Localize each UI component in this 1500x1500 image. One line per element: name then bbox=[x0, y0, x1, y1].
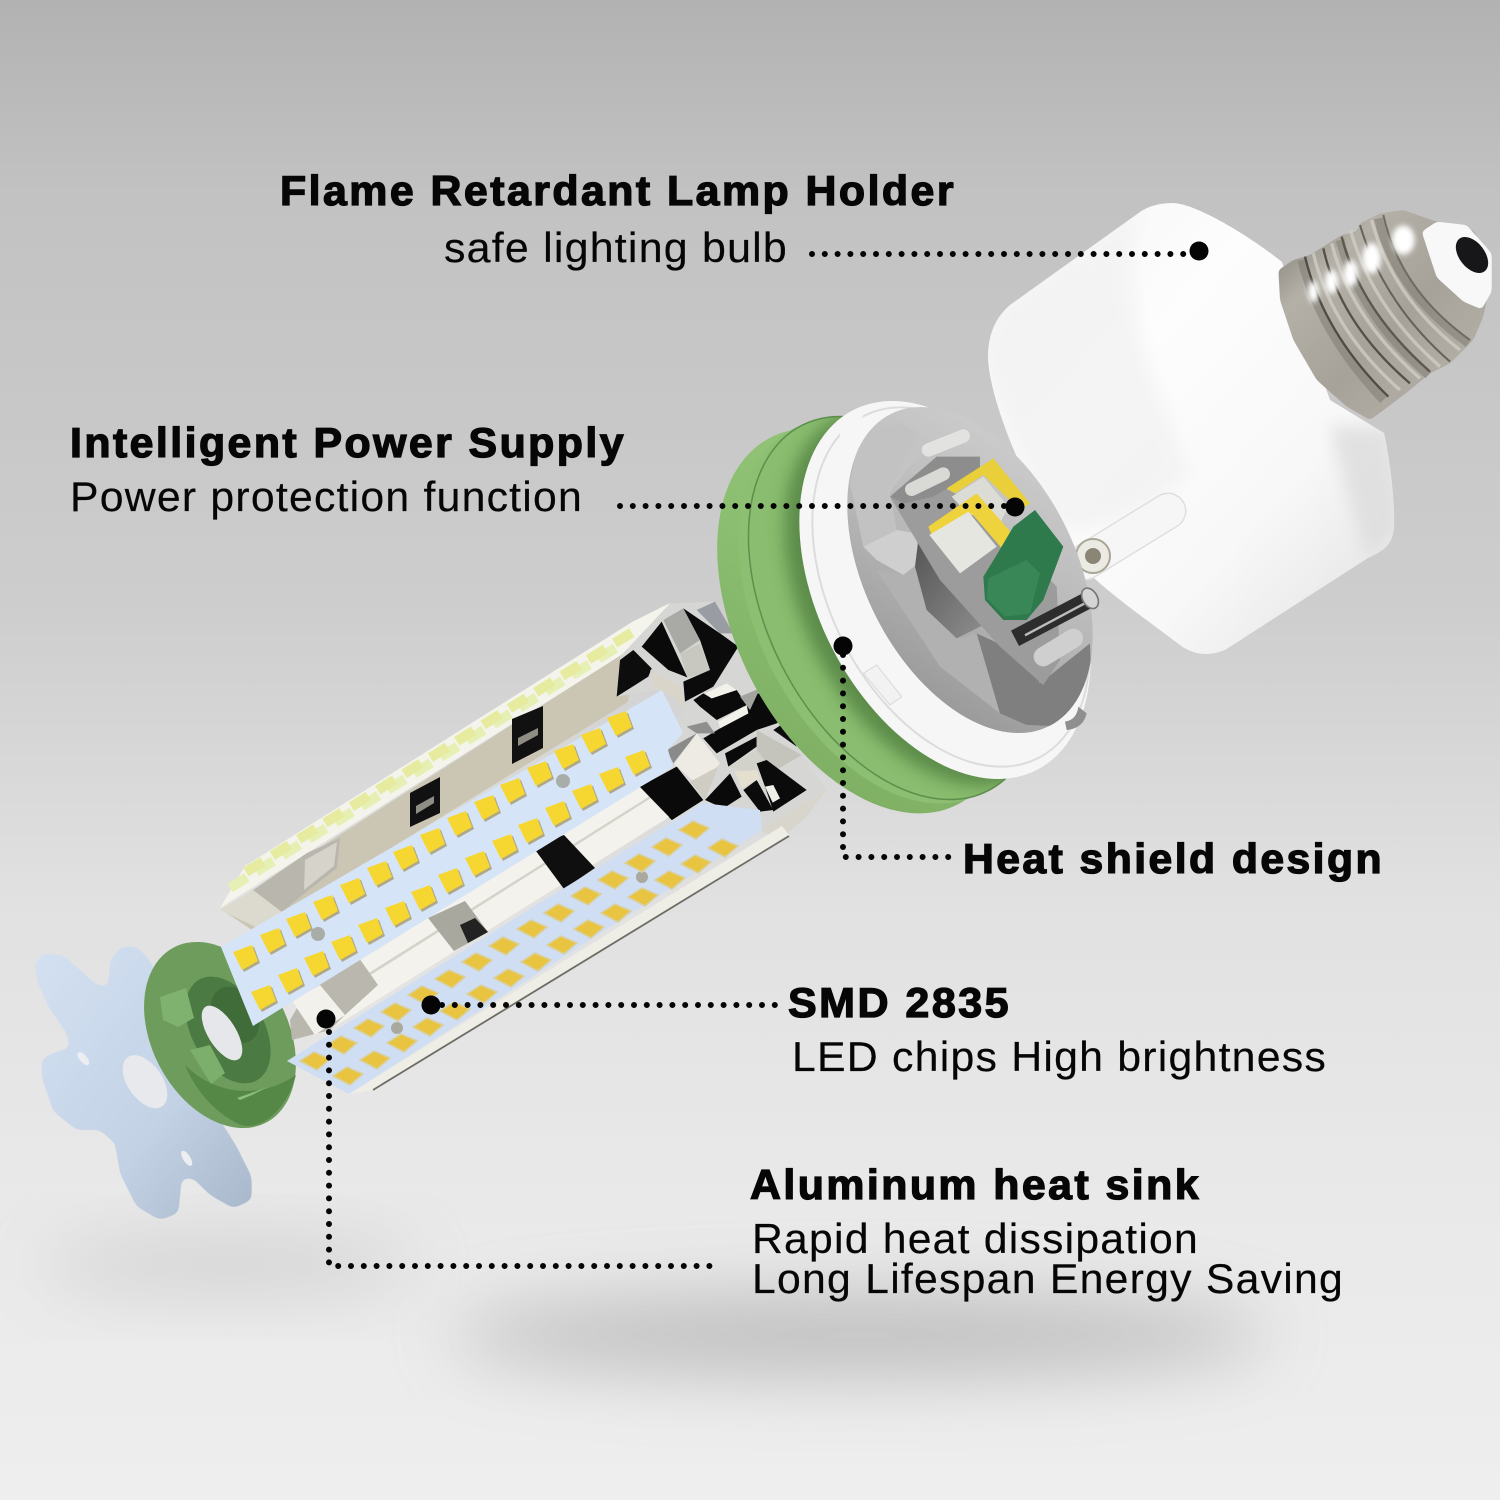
black facet bbox=[743, 780, 773, 812]
end cap clip upper bbox=[160, 988, 194, 1027]
black facet bbox=[705, 773, 742, 808]
plate screw hole right bbox=[179, 1149, 194, 1168]
leader dot bbox=[1006, 498, 1024, 516]
block stripe bbox=[655, 783, 691, 804]
panel screw one bbox=[311, 927, 325, 941]
black facet bbox=[617, 650, 652, 697]
heat sink mirrored end bbox=[617, 602, 827, 840]
back LED panel bbox=[220, 603, 670, 932]
thread groove bbox=[1342, 237, 1430, 372]
white lamp holder body bbox=[988, 203, 1400, 654]
beige facet bbox=[650, 670, 687, 712]
cavity light wall bbox=[850, 432, 896, 546]
yellow bracket back bbox=[947, 458, 1030, 510]
capacitor highlight bbox=[987, 560, 1040, 617]
ring tab bbox=[863, 665, 902, 705]
power supply cavity bbox=[840, 406, 1100, 733]
white ring bbox=[740, 352, 1150, 828]
description: LED chips High brightness bbox=[792, 1033, 1327, 1080]
black band bbox=[703, 692, 782, 753]
callout: SMD 2835 bbox=[422, 979, 1327, 1080]
cavity dark well bbox=[915, 540, 987, 638]
silver terminal one bbox=[928, 436, 963, 450]
white block back bbox=[952, 477, 1008, 523]
thread highlights bbox=[1308, 225, 1415, 302]
leader dot bbox=[1190, 242, 1208, 260]
icon: green end cap bbox=[113, 916, 327, 1154]
thread groove bbox=[1360, 225, 1450, 362]
thread groove bbox=[1323, 248, 1410, 383]
grey facet bbox=[740, 688, 760, 710]
leader dot bbox=[834, 636, 852, 656]
lower panel screw two bbox=[636, 871, 648, 883]
base contact hole bbox=[1449, 231, 1495, 279]
strip black block bbox=[533, 835, 595, 889]
lower LED panel bbox=[287, 767, 789, 1094]
callout: flame retardant lamp holder bbox=[280, 167, 1208, 271]
lower LED row two bbox=[333, 839, 738, 1085]
lower LED row one bbox=[300, 821, 709, 1070]
grey panel bbox=[728, 750, 773, 772]
disc side body bbox=[679, 372, 1091, 852]
silver terminal two bbox=[912, 474, 943, 489]
description: safe lighting bulb bbox=[444, 224, 788, 271]
callout: aluminum heat sink bbox=[316, 1010, 1344, 1302]
holder shading bbox=[988, 212, 1400, 560]
panel screw two bbox=[556, 774, 570, 788]
ground shadow bbox=[40, 1241, 1270, 1377]
back panel black reflection two bbox=[410, 777, 440, 827]
grey facet bbox=[697, 602, 733, 633]
callout: heat shield design bbox=[834, 636, 1384, 882]
end cap collar top bbox=[201, 978, 269, 1052]
grey facet bbox=[667, 733, 697, 763]
heading: Intelligent Power Supply bbox=[70, 419, 626, 466]
leader dot bbox=[422, 996, 440, 1014]
front LED panel bbox=[221, 690, 683, 1026]
base insulator tip bbox=[1422, 222, 1492, 309]
black block bbox=[640, 767, 703, 820]
back panel LED row front bbox=[230, 644, 622, 888]
pin two bbox=[1043, 638, 1073, 657]
green heat shield disc bbox=[717, 416, 1007, 814]
end tail bbox=[760, 790, 827, 840]
back panel front lip bbox=[220, 890, 282, 930]
pin one tip bbox=[1078, 585, 1102, 612]
strip white patch bbox=[292, 985, 345, 1035]
ring clip bottom bbox=[1065, 707, 1087, 730]
holder mounting slot bbox=[1085, 511, 1168, 562]
back panel mirror grey bbox=[253, 838, 340, 912]
lower panel board bbox=[287, 803, 762, 1094]
prism side bbox=[690, 767, 718, 800]
heading: SMD 2835 bbox=[788, 979, 1011, 1026]
end cap centre hole bbox=[194, 999, 250, 1067]
cavity interior shapes bbox=[850, 423, 1092, 727]
heading: Flame Retardant Lamp Holder bbox=[280, 167, 956, 214]
leader line bbox=[843, 655, 950, 857]
light facet bbox=[735, 770, 760, 788]
lower panel edge line bbox=[373, 836, 789, 1090]
back panel black reflection one bbox=[512, 706, 543, 764]
white facet bbox=[765, 785, 780, 803]
cavity light boss bbox=[863, 530, 918, 575]
cavity crescent bbox=[900, 605, 1000, 713]
front LED row one bbox=[233, 711, 634, 972]
black facet bbox=[642, 622, 687, 677]
thread groove bbox=[1383, 215, 1470, 340]
description line one: Rapid heat dissipation bbox=[752, 1215, 1199, 1262]
screw base bbox=[1278, 210, 1495, 420]
description line two: Long Lifespan Energy Saving bbox=[752, 1255, 1344, 1302]
grey panel bbox=[757, 730, 802, 772]
strip mirror detail bbox=[460, 918, 488, 943]
heading: Aluminum heat sink bbox=[750, 1161, 1201, 1208]
back panel mirror light bbox=[304, 842, 337, 890]
lower panel black block bbox=[640, 767, 703, 820]
white prism bbox=[674, 733, 720, 787]
white block front bbox=[929, 512, 997, 573]
end cap collar bbox=[168, 962, 288, 1098]
plate screw hole left bbox=[75, 1050, 91, 1067]
thread band shading bbox=[1302, 218, 1468, 400]
back panel LED row rear bbox=[246, 630, 636, 872]
description: Power protection function bbox=[70, 473, 583, 520]
end cap lower shade bbox=[185, 1065, 296, 1126]
end cap clip lower bbox=[190, 1045, 225, 1084]
terminal bracket light bbox=[887, 437, 927, 495]
strip grey reflection bbox=[290, 948, 378, 1040]
icon: metal reflector plate bbox=[35, 947, 252, 1220]
black facet bbox=[683, 608, 738, 702]
grey facet bbox=[663, 608, 700, 653]
green capacitor bbox=[983, 510, 1063, 620]
black facet bbox=[757, 760, 807, 812]
black facet bbox=[725, 737, 757, 767]
terminal plate bbox=[890, 457, 980, 503]
ring groove bbox=[756, 361, 1146, 813]
light facet bbox=[680, 643, 710, 677]
plate centre hole bbox=[114, 1047, 176, 1116]
holder screw bbox=[1076, 539, 1110, 573]
strip shade band bbox=[310, 796, 651, 1012]
leader line bbox=[812, 251, 1190, 257]
disc seam bbox=[689, 368, 1101, 848]
circuit board bbox=[890, 477, 1060, 685]
leader line bbox=[442, 1002, 776, 1008]
cavity lower sector bbox=[977, 633, 1092, 727]
grey facet bbox=[687, 722, 715, 733]
pin one shine bbox=[1025, 603, 1086, 635]
leader line bbox=[329, 1032, 710, 1266]
cavity components bbox=[840, 407, 1102, 730]
yellow bracket front bbox=[928, 493, 1013, 550]
white stripe bbox=[705, 683, 737, 698]
leader dot bbox=[316, 1010, 336, 1028]
ring clip top bbox=[840, 407, 867, 440]
back panel top face bbox=[220, 603, 670, 908]
end cap slot bbox=[237, 1087, 268, 1100]
thread groove bbox=[1305, 257, 1388, 397]
disc shadow under ring bbox=[776, 416, 1004, 794]
mirrored centre strip bbox=[290, 785, 674, 1040]
callout: intelligent power supply bbox=[70, 419, 1024, 520]
thread light rim bbox=[1313, 220, 1460, 390]
pin one bbox=[1015, 600, 1088, 638]
strip mirror block bbox=[428, 901, 488, 951]
leader line bbox=[620, 503, 1005, 509]
front LED row two bbox=[251, 750, 652, 1012]
white stripe bbox=[718, 705, 748, 728]
black facet bbox=[693, 690, 747, 720]
heading: Heat shield design bbox=[963, 835, 1384, 882]
black facet bbox=[773, 723, 797, 747]
lower panel screw one bbox=[391, 1022, 403, 1034]
